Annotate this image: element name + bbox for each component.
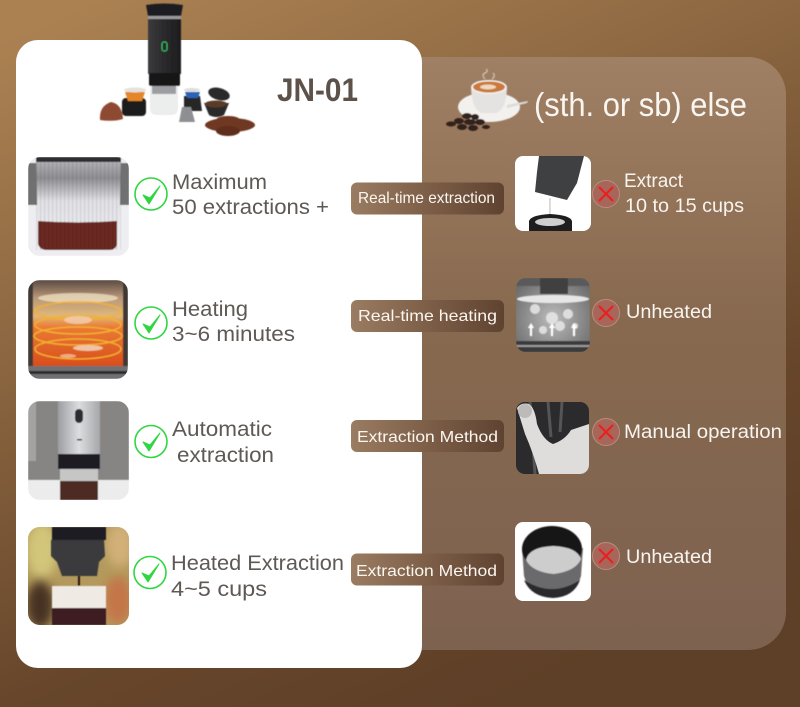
label pill: Real-time extraction: [358, 190, 495, 207]
photo: unheated water: [516, 278, 590, 352]
row 4: heated extraction: [26, 522, 712, 629]
icon: cross: [592, 542, 620, 570]
text: maximum extractions: [172, 171, 329, 219]
icon: check: [135, 426, 167, 458]
text: heating minutes: 3~6 minutes: [172, 323, 295, 346]
icon: check: [135, 178, 167, 210]
heading: JN-01: JN-01: [277, 72, 358, 108]
text: extract cups: [624, 171, 744, 217]
icon: check: [134, 556, 166, 588]
photo: frosted cup with coffee: [28, 157, 129, 256]
text: maximum extractions: Maximum: [172, 171, 267, 194]
photo: black capsule holder: [515, 522, 591, 601]
photo: machine brewing: [28, 527, 129, 625]
photo: manual press: [516, 402, 589, 474]
label pill: Real-time heating: [358, 308, 497, 325]
text: heating minutes: [172, 298, 295, 346]
text: manual operation: Manual operation: [624, 422, 782, 443]
text: heated extraction cups: 4~5 cups: [171, 578, 267, 601]
text: automatic extraction: extraction: [177, 444, 274, 467]
text: heated extraction cups: [171, 552, 344, 601]
icon: cross: [592, 418, 620, 446]
text: extract cups: Extract: [624, 171, 684, 192]
photo: silver machine: [28, 401, 129, 500]
heading: (sth. or sb) else: (sth. or sb) else: [534, 86, 747, 123]
text: unheated: Unheated: [626, 547, 712, 568]
row 1: extractions: [28, 156, 744, 256]
icon: JN-01 product group: [100, 4, 255, 136]
icon: check: [135, 307, 167, 339]
label pill: Extraction Method: [357, 429, 498, 446]
text: maximum extractions: 50 extractions +: [172, 196, 329, 219]
label pill: [351, 554, 504, 586]
row 2: heating: [28, 278, 712, 379]
text: heated extraction cups: Heated Extraction: [171, 552, 344, 575]
icon: coffee cup and beans: [446, 69, 528, 131]
text: extract cups: 10 to 15 cups: [625, 196, 744, 217]
icon: cross: [592, 300, 620, 326]
text: automatic extraction: [172, 418, 274, 467]
label pill: Extraction Method: [356, 563, 497, 580]
photo: heated water: [28, 280, 128, 379]
text: unheated: Unheated: [626, 302, 712, 323]
icon: cross: [592, 180, 620, 208]
panel: competitor comparison: [400, 57, 786, 650]
row 3: automatic: [28, 401, 782, 500]
photo: pouring machine: [515, 156, 591, 231]
label pill: [351, 182, 504, 214]
text: heating minutes: Heating: [172, 298, 248, 321]
label pill: [351, 300, 504, 332]
label pill: [351, 420, 504, 452]
text: automatic extraction: Automatic: [172, 418, 272, 441]
panel: JN-01 features: [16, 40, 422, 668]
